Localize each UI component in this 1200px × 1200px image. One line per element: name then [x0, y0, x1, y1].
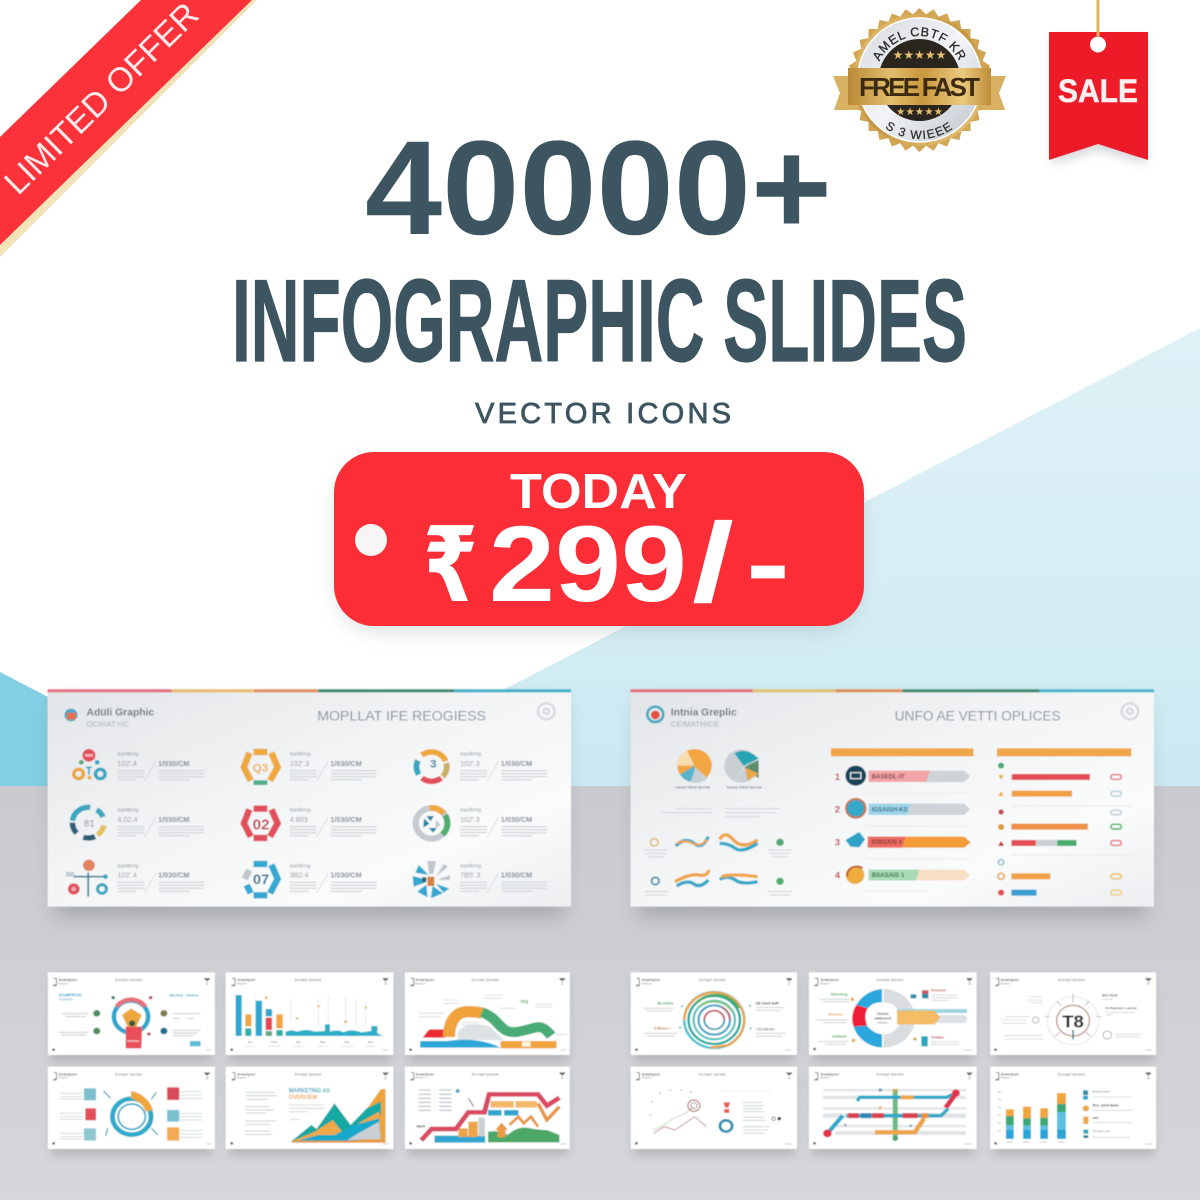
- item 4 text: 4.02.4: [117, 816, 138, 824]
- slide: route chart: [405, 1067, 570, 1149]
- slide: ring and hand: SAMPRAE: [59, 992, 82, 997]
- slide: radial symbol: Ad Bayloam a parsal: [1105, 1006, 1137, 1010]
- title: 40000+: 40000+: [365, 114, 832, 263]
- slide: wave chart: [405, 972, 570, 1055]
- slide: radial symbol: Report: [1001, 981, 1010, 985]
- slide: stacked bars: Rev. yield Bdas: [1093, 1104, 1119, 1108]
- item 2 text: [290, 752, 376, 781]
- mini icons beside charts: [644, 839, 792, 895]
- slide: bar chart: Jan: [247, 1040, 253, 1044]
- slide: donut and arrow: Revenue: [828, 1013, 843, 1017]
- item 6 text: 1/030/CM: [501, 816, 532, 824]
- battery pills: [1111, 775, 1121, 895]
- item 8: 07: [253, 872, 269, 888]
- badge: free fast gold seal: FREE FAST: [859, 72, 980, 102]
- slide: stacked bars: Service cost: [1093, 1129, 1110, 1133]
- badge: free fast gold seal: ★★★★★: [896, 106, 943, 118]
- slide: route chart: Report: [416, 1076, 425, 1080]
- slide: bar chart: Sunapt Ipeask: [294, 977, 322, 982]
- item 6 text: lsanlbrng: [460, 808, 481, 814]
- item 1 text: 1/030/CM: [158, 760, 190, 768]
- slide: radial symbol: [990, 972, 1156, 1055]
- item 6: [416, 808, 447, 839]
- arrow row 2: [835, 799, 970, 818]
- arrow row 4: BSASAIS 1: [872, 872, 905, 879]
- slide: wave chart: Sunapt Ipeask: [472, 977, 500, 982]
- arrow row 3: [835, 832, 971, 848]
- item 2: [244, 752, 278, 783]
- item 4 text: 1/030/CM: [158, 816, 190, 824]
- slide: route chart: Sunapt Ipeask: [472, 1071, 500, 1076]
- arrow row 4: [835, 866, 970, 884]
- slide: concentric rings: 8 Blaosn !: [654, 1027, 671, 1031]
- item 1 text: 102'.4: [117, 760, 137, 768]
- slide: line chart and icons: Report: [642, 1076, 652, 1080]
- slide: bar chart: Apr: [345, 1040, 350, 1044]
- slide: mountain chart: [226, 1067, 393, 1149]
- panel: small slides left group: [48, 972, 570, 1149]
- price tag: today 299: -: [746, 502, 790, 623]
- slide: donut and arrow: solution: [877, 1021, 889, 1025]
- item 9 text: lsanlbrng: [460, 863, 481, 869]
- slide: line chart and icons: Ananlyzer: [642, 1072, 661, 1076]
- horizontal bars: [1011, 774, 1090, 896]
- item 2 text: lsanlbrng: [290, 752, 311, 758]
- slide: ring and hand: Ananlyzer: [59, 978, 78, 982]
- slide: radial symbol: Bril Hirot: [1102, 994, 1118, 998]
- item 9 text: 1/030/CM: [501, 872, 532, 880]
- slide: stacked bars: Ananlyzer: [1001, 1072, 1020, 1076]
- item 8 text: lsanlbrng: [290, 863, 311, 869]
- item 1: [74, 749, 105, 780]
- slide: subway map: Sunapt Ipeask: [876, 1071, 904, 1076]
- item 5 text: 1/030/CM: [330, 816, 362, 824]
- panel: large slide right: [631, 689, 1154, 907]
- slide: donut and arrow: Analysis: [832, 1034, 847, 1038]
- price tag: today 299: 299: [489, 503, 687, 624]
- slide: ring and hand: Report: [59, 981, 68, 985]
- slide title: MOPLLAT IFE REOGIESS: [317, 709, 486, 724]
- slide: concentric rings: Ananlyzer: [642, 978, 661, 982]
- slide: donut and arrow: Sunapt Ipeask: [876, 977, 904, 982]
- slide: donut and arrow: Overall: [877, 1012, 889, 1016]
- item 2 text: 102'.3: [290, 760, 309, 768]
- badge: free fast gold seal: AMEL CBTF KR: [874, 27, 966, 62]
- slide: route chart: Ananlyzer: [416, 1072, 435, 1076]
- slide: stacked bars: Brand reach: [1093, 1090, 1110, 1094]
- badge: free fast gold seal: ★★★★★: [893, 48, 946, 62]
- slide: line chart and icons: Sunapt Ipeask: [698, 1071, 727, 1076]
- color bar: [631, 689, 1154, 692]
- slide: bar chart: Mar: [320, 1040, 325, 1044]
- background: teal left corner: [0, 672, 48, 786]
- item 8 text: [290, 863, 376, 893]
- arrow row 3: 3: [835, 837, 840, 848]
- slide: route chart: Marit: [417, 1125, 426, 1129]
- item 7: [66, 860, 108, 897]
- panel: small slides right group: [631, 972, 1156, 1149]
- middle header bar: [831, 748, 974, 756]
- slide: concentric rings: [631, 972, 797, 1055]
- slide: donut and arrow: statement: [874, 1016, 892, 1020]
- arrow row 1: [835, 766, 970, 786]
- item 4 text: lsanlbrng: [117, 808, 139, 814]
- icon: corner gear: [1122, 703, 1138, 719]
- logo and brand: Adüli Graphic: [86, 708, 155, 719]
- slide: mountain chart: Ananlyzer: [237, 1072, 256, 1076]
- pie labels: [661, 786, 780, 817]
- slide: concentric rings: TSOSEAN: [756, 1027, 775, 1031]
- slide: mountain chart: OVERVIEW: [289, 1094, 318, 1101]
- divider lines: [863, 793, 1131, 891]
- price tag: today 299: /: [692, 500, 734, 625]
- slide: subway map: Report: [820, 1076, 830, 1080]
- slide: bar chart: [226, 972, 393, 1055]
- slide: concentric rings: Report: [642, 981, 652, 985]
- slide: stacked bars: Report: [1001, 1076, 1010, 1080]
- slide: stacked bars: Sunapt Ipeask: [1058, 1071, 1086, 1076]
- slide: wave chart: Ananlyzer: [416, 978, 435, 982]
- item 2 text: 1/030/CM: [330, 760, 362, 768]
- slide: bar chart: Report: [237, 981, 247, 985]
- item 3 text: [460, 752, 547, 781]
- item 8: [245, 864, 278, 895]
- item 9 text: 7B5'.3: [460, 872, 480, 880]
- slide title: UNFO AE VETTI OPLICES: [895, 709, 1061, 724]
- slide: double ring: Report: [59, 1076, 68, 1080]
- slide: radial symbol: Ananlyzer: [1001, 978, 1020, 982]
- item 5 text: 4.803: [290, 816, 308, 824]
- slide: donut and arrow: Report: [820, 981, 830, 985]
- slide: bar chart: Dec: [368, 1040, 374, 1044]
- badge: free fast gold seal: S 3 WIEEE: [886, 122, 952, 140]
- slide: ring and hand: [48, 972, 215, 1055]
- slide: bar chart: Apr: [296, 1040, 301, 1044]
- arrow row 2: IGSAISH-KS: [872, 806, 908, 813]
- logo and brand: Intnia Greplic: [671, 708, 737, 719]
- wave charts: [675, 835, 758, 886]
- badge: free fast gold seal: [833, 8, 1006, 152]
- slide: ring and hand: Monthly · Strateo: [170, 993, 199, 997]
- icon: corner gear: [538, 703, 555, 719]
- ribbon: limited offer: [0, 0, 257, 257]
- arrow row 3: IGBSAIS 1: [872, 839, 903, 846]
- slide: radial symbol: T8: [1062, 1012, 1084, 1032]
- slide: wave chart: Report: [416, 981, 425, 985]
- slide: bar chart: Feb: [271, 1040, 277, 1044]
- slide: concentric rings: BLOSSA: [657, 1001, 674, 1005]
- background: gray lower band: [0, 786, 1200, 1200]
- slide: donut and arrow: [809, 972, 977, 1055]
- item 6 text: 102'.3: [460, 816, 480, 824]
- slide: stacked bars: [990, 1067, 1156, 1149]
- shadows under small slides: [51, 979, 1154, 1155]
- item 4: [72, 807, 104, 838]
- slide: mountain chart: Sunapt Ipeask: [294, 1071, 322, 1076]
- panel: large slide left: [48, 689, 571, 907]
- slide: radial symbol: Sunapt Ipeask: [1058, 977, 1086, 982]
- slide: stacked bars: MRI: [1093, 1116, 1099, 1120]
- slide: ring and hand: Sunapt Ipeask: [115, 977, 143, 982]
- slide: concentric rings: Sunapt Ipeask: [698, 977, 727, 982]
- item 3 text: lsanlbrng: [460, 752, 481, 758]
- item 7 text: lsanlbrng: [117, 863, 139, 869]
- item 4: 81: [84, 819, 95, 830]
- item 5 text: [290, 808, 376, 837]
- item 1 text: [117, 752, 204, 781]
- bar icons: [998, 763, 1004, 896]
- item 7 text: 102'.4: [117, 872, 137, 880]
- shadows under large slides: [54, 702, 1147, 918]
- logo and brand: [647, 707, 737, 729]
- item 5: 02: [253, 818, 270, 833]
- logo and brand: CEIMATNICE: [671, 720, 719, 729]
- slide: double ring: [48, 1067, 215, 1149]
- item 3: [416, 752, 447, 781]
- item 7 text: 1/030/CM: [158, 872, 190, 880]
- price tag: today 299: ₹: [423, 508, 478, 624]
- item 8 text: 1/030/CM: [330, 872, 362, 880]
- background: light blue diagonal panel: [320, 328, 1200, 787]
- item 8 text: 3B2.4: [290, 872, 309, 880]
- slide: concentric rings: 2B Ganf tuiP: [756, 1001, 780, 1005]
- item 6 text: [460, 808, 547, 837]
- slide: mountain chart: Report: [237, 1076, 247, 1080]
- item 9 text: [460, 863, 547, 893]
- slide: ring and hand: Nowhere: [59, 997, 73, 1001]
- item 5: [244, 809, 278, 838]
- item 5 text: lsanlbrng: [290, 808, 311, 814]
- price tag: today 299: TODAY: [510, 465, 687, 519]
- slide: double ring: Ananlyzer: [59, 1072, 78, 1076]
- right header bar: [997, 748, 1131, 756]
- pie charts: [677, 749, 759, 783]
- item 9: [413, 861, 450, 898]
- slide: donut and arrow: Ananlyzer: [820, 978, 840, 982]
- slide: subway map: Ananlyzer: [820, 1072, 840, 1076]
- arrow row 1: BASEDL-IT: [872, 774, 905, 781]
- slide: bar chart: Ananlyzer: [237, 978, 256, 982]
- arrow row 2: 2: [835, 805, 840, 816]
- sale tag: [1049, 0, 1148, 164]
- slide: line chart and icons: [631, 1067, 797, 1149]
- slide: subway map: [809, 1067, 977, 1149]
- slide: donut and arrow: Marketing: [831, 993, 848, 997]
- arrow row 4: 4: [835, 871, 841, 882]
- item 3 text: 1/030/CM: [501, 760, 532, 768]
- item 1 text: lsanlbrng: [117, 752, 139, 758]
- item 7 text: [117, 863, 204, 893]
- color bar: [48, 689, 571, 692]
- item 3: 3: [430, 758, 437, 770]
- slide: double ring: Sunapt Ipeask: [115, 1071, 143, 1076]
- item 4 text: [117, 808, 204, 837]
- slide: wave chart: 3IQ: [520, 999, 528, 1005]
- logo and brand: [64, 708, 155, 729]
- price tag: today 299: [334, 452, 864, 630]
- item 3 text: 102'.3: [460, 760, 480, 768]
- pie labels: lnavai Otbot Bornar: [675, 786, 711, 790]
- slide: donut and arrow: Revision: [931, 989, 946, 993]
- item 7: BB: [66, 872, 74, 879]
- item 2: Q3: [253, 763, 268, 775]
- logo and brand: OCRIATYIC: [86, 720, 129, 729]
- slide: donut and arrow: Rebase: [931, 1035, 944, 1039]
- arrow row 1: 1: [835, 772, 840, 783]
- subheading: vector icons: VECTOR ICONS: [475, 398, 731, 430]
- slide: mountain chart: MARKETING AS: [289, 1087, 330, 1094]
- pie labels: lnavai Otbot Bornar: [727, 786, 763, 790]
- sale tag: SALE: [1058, 73, 1138, 109]
